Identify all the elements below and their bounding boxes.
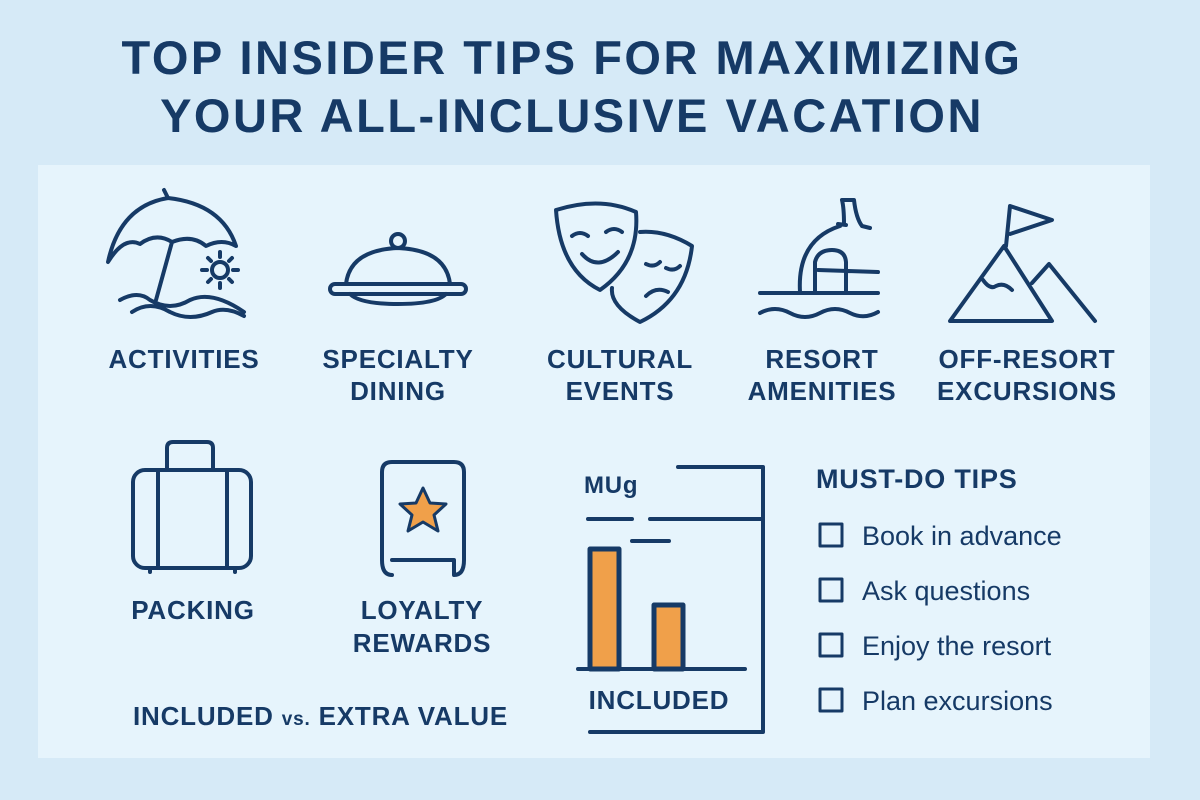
icon labels: DINING: [350, 376, 446, 406]
icon labels: SPECIALTY: [322, 344, 474, 374]
icon: suitcase: [133, 442, 251, 572]
chart: [578, 467, 763, 732]
must-do tips: [816, 464, 1062, 716]
icon labels: RESORT: [765, 344, 879, 374]
icon labels: CULTURAL: [547, 344, 693, 374]
icon labels: OFF-RESORT: [938, 344, 1116, 374]
title: TOP INSIDER TIPS FOR MAXIMIZING: [122, 31, 1022, 84]
icon labels: [108, 344, 1117, 731]
inner panel: [38, 165, 1150, 758]
icon labels: INCLUDED: [589, 685, 729, 715]
icon: resort amenities: [760, 200, 878, 317]
title: YOUR ALL-INCLUSIVE VACATION: [160, 89, 984, 142]
icon: loyalty card: [382, 462, 464, 575]
must-do tips: Book in advance: [862, 521, 1062, 551]
must-do tips: Ask questions: [862, 576, 1030, 606]
icon labels: PACKING: [131, 595, 255, 625]
icon labels: LOYALTY: [361, 595, 483, 625]
icon: theater masks: [556, 203, 692, 322]
title: [122, 31, 1022, 142]
icon labels: INCLUDED vs. EXTRA VALUE: [133, 701, 508, 731]
checkboxes: [820, 524, 842, 711]
icon labels: EXCURSIONS: [937, 376, 1117, 406]
icon: mountain flag: [950, 206, 1095, 321]
must-do tips: Enjoy the resort: [862, 631, 1052, 661]
icon labels: ACTIVITIES: [108, 344, 260, 374]
icon labels: EVENTS: [566, 376, 674, 406]
icon labels: AMENITIES: [748, 376, 896, 406]
icon: cloche: [330, 234, 466, 304]
must-do tips: Plan excursions: [862, 686, 1053, 716]
icon labels: REWARDS: [353, 628, 491, 658]
icon: beach umbrella: [108, 190, 244, 317]
must-do tips: MUST-DO TIPS: [816, 464, 1018, 494]
icon labels: MUg: [584, 472, 638, 499]
